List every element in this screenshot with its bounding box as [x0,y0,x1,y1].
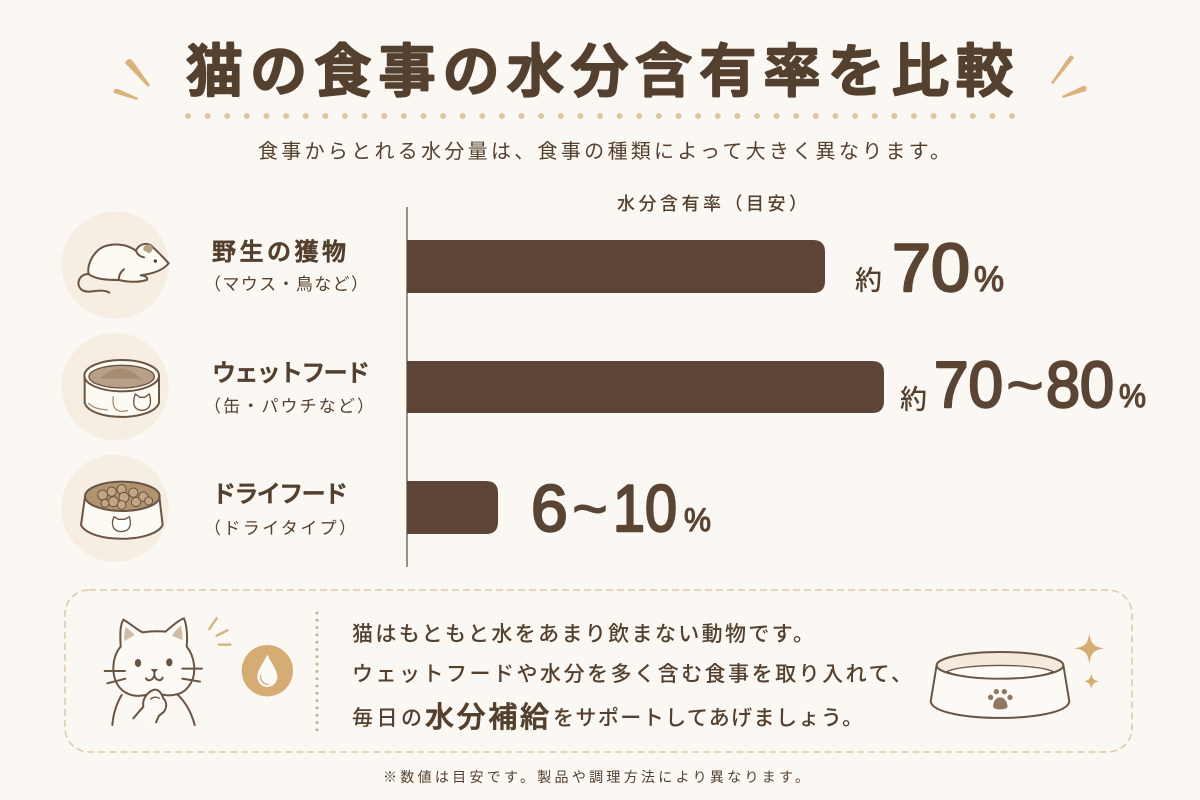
label: dry food: ドライフード [212,474,348,509]
value: wild prey: % [974,260,1004,299]
chart heading: 水分含有率（目安） [617,190,807,216]
value: wet food: 70 [934,348,1003,421]
label: wild prey: 野生の獲物 [212,232,346,267]
icon: water drop [242,645,293,696]
bar chart axis [406,207,408,567]
footnote: ※数値は目安です。製品や調理方法により異なります。 [383,767,809,787]
sublabel: wild prey: （マウス・鳥など） [204,270,368,295]
tip text [352,618,912,736]
sublabel: wet food: （缶・パウチなど） [204,392,374,417]
panel: hydration tip [65,590,1132,752]
title: 猫の食事の水分含有率を比較 [186,26,1013,108]
value: dry food: % [684,502,711,538]
icon: right title sparkle [1051,56,1087,98]
value: wild prey [855,230,1004,306]
icon: can [61,333,169,440]
value: wet food: % [1119,378,1146,414]
dotted divider [316,613,318,731]
bar: wild prey [407,240,825,293]
tip text: 猫はもともと水をあまり飲まない動物です。 [352,618,814,648]
icon: left title sparkle [114,59,150,100]
row: dry food [61,455,711,562]
icon: mouse [61,211,169,319]
value: wet food: 80 [1046,348,1114,421]
icon: sparkles [1075,633,1104,689]
value: dry food [531,471,711,545]
value: wild prey: 約 [855,259,882,298]
icon: thinking cat [105,618,230,725]
value: dry food: 10 [613,471,677,545]
value: dry food: ~ [572,471,608,545]
tip text: ウェットフードや水分を多く含む食事を取り入れて、 [352,658,912,688]
icon: water bowl [931,652,1069,718]
subtitle: 食事からとれる水分量は、食事の種類によって大きく異なります。 [258,135,950,164]
row: wet food [61,333,1146,440]
value: wet food: 約 [900,378,927,417]
tip text: 水分補給 [425,694,549,736]
value: dry food: 6 [531,471,568,545]
sublabel: dry food: （ドライタイプ） [204,514,356,539]
icon: bowl of kibble [61,455,169,562]
dotted title underline [188,113,1013,119]
bar: wet food [407,361,884,413]
bar: dry food [407,481,498,534]
tip text: をサポートしてあげましょう。 [553,702,863,732]
value: wet food [900,348,1146,421]
row: wild prey [61,211,1004,319]
label: wet food: ウェットフード [212,353,370,388]
value: wild prey: 70 [892,230,970,306]
value: wet food: ~ [1006,348,1044,421]
tip text: 毎日の [352,702,422,732]
